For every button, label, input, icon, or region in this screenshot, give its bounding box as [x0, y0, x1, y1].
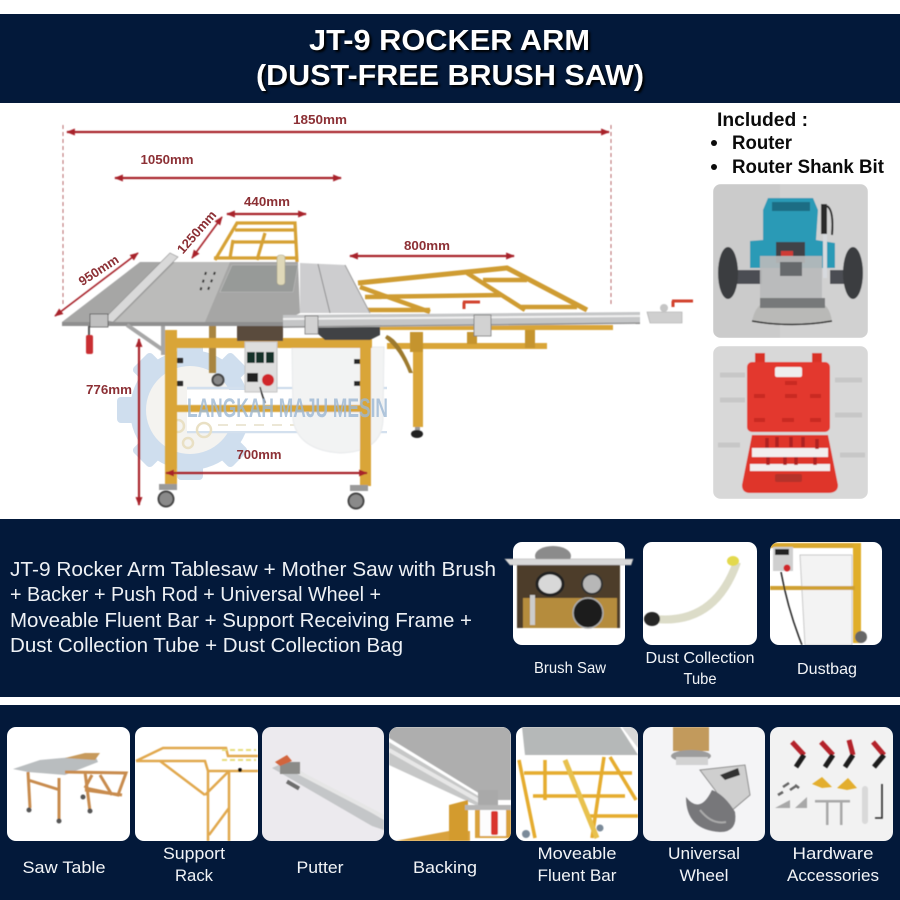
title [256, 25, 644, 92]
label: universal wheel: Wheel [680, 866, 728, 885]
label: backing: Backing [413, 858, 477, 877]
label: moveable fluent bar [538, 844, 617, 885]
sliding extension frame [358, 268, 587, 312]
label: support rack: Rack [175, 866, 213, 885]
yellow stand [165, 325, 613, 490]
dimension labels: 1050mm [140, 152, 194, 167]
dimension labels: 1850mm [293, 112, 347, 127]
dimension arrows [55, 125, 611, 505]
panel: router bit case photo [713, 346, 868, 499]
card: universal wheel [643, 727, 765, 841]
label: universal wheel: Universal [668, 844, 740, 863]
diagram: saw table with dimensions [55, 125, 693, 508]
label: dustbag: Dustbag [797, 661, 857, 678]
title: JT-9 ROCKER ARM [309, 25, 590, 57]
card: dustbag [770, 542, 882, 645]
dimension labels: 1250mm [174, 207, 219, 257]
title banner [0, 14, 900, 103]
label: putter: Putter [296, 858, 344, 877]
label: moveable fluent bar: Moveable [538, 844, 616, 863]
dimension labels: 776mm [86, 382, 132, 397]
label: hardware accessories: Hardware [792, 844, 874, 863]
case lid [747, 353, 830, 432]
gray under-table machinery [237, 325, 283, 341]
router body [750, 198, 835, 268]
rear support frame [214, 223, 297, 262]
card: dust collection tube [643, 542, 757, 645]
label: moveable fluent bar: Fluent Bar [538, 866, 617, 885]
card: backing [389, 727, 511, 841]
contents description: JT-9 Rocker Arm Tablesaw + Mother Saw with Brush [10, 559, 496, 581]
dimension labels: 950mm [76, 252, 121, 289]
label: hardware accessories: Accessories [787, 866, 879, 885]
card: brush saw [505, 542, 633, 645]
contents description: + Backer + Push Rod + Universal Wheel + [10, 584, 381, 606]
label: support rack: Support [163, 844, 225, 863]
casters [158, 374, 423, 508]
panel: contents band [0, 519, 900, 697]
card: saw table [7, 727, 130, 841]
watermark text: LANGKAH MAJU MESIN [187, 393, 388, 423]
panel: accessories band [0, 705, 900, 900]
included list: Included : [717, 110, 808, 131]
label: hardware accessories [787, 844, 879, 885]
contents description: Moveable Fluent Bar + Support Receiving Frame + [10, 610, 472, 632]
dimension labels [76, 112, 450, 462]
included list: Router [732, 133, 793, 154]
included list [711, 110, 885, 178]
card: moveable fluent bar [516, 727, 638, 841]
included list: Router Shank Bit [732, 157, 885, 178]
table top [62, 253, 370, 326]
contents description [10, 559, 496, 657]
rip fence clamp and handle [86, 314, 163, 355]
label: dust collection tube [646, 650, 754, 688]
dimension labels: 440mm [244, 194, 290, 209]
emergency control box [245, 342, 277, 403]
dimension labels: 800mm [404, 238, 450, 253]
label: dust collection tube: Dust Collection [646, 650, 754, 667]
contents description: Dust Collection Tube + Dust Collection Bag [10, 635, 403, 657]
label: brush saw: Brush Saw [534, 660, 606, 677]
dimension labels: 700mm [236, 447, 282, 462]
dust collection bag [292, 347, 384, 453]
watermark: gear logo and brand [117, 340, 387, 480]
case base with bits [742, 435, 838, 493]
card: hardware accessories [770, 727, 893, 841]
label: dust collection tube: Tube [684, 671, 717, 688]
label: universal wheel [668, 844, 740, 885]
label: support rack [163, 844, 225, 885]
leg knobs [177, 358, 360, 386]
long sliding fence [283, 301, 693, 336]
card: putter [262, 727, 384, 841]
card: support rack [135, 727, 258, 841]
label: saw table: Saw Table [22, 858, 106, 877]
title: (DUST-FREE BRUSH SAW) [256, 60, 644, 92]
panel: router photo [713, 184, 868, 338]
router handles [718, 247, 863, 299]
